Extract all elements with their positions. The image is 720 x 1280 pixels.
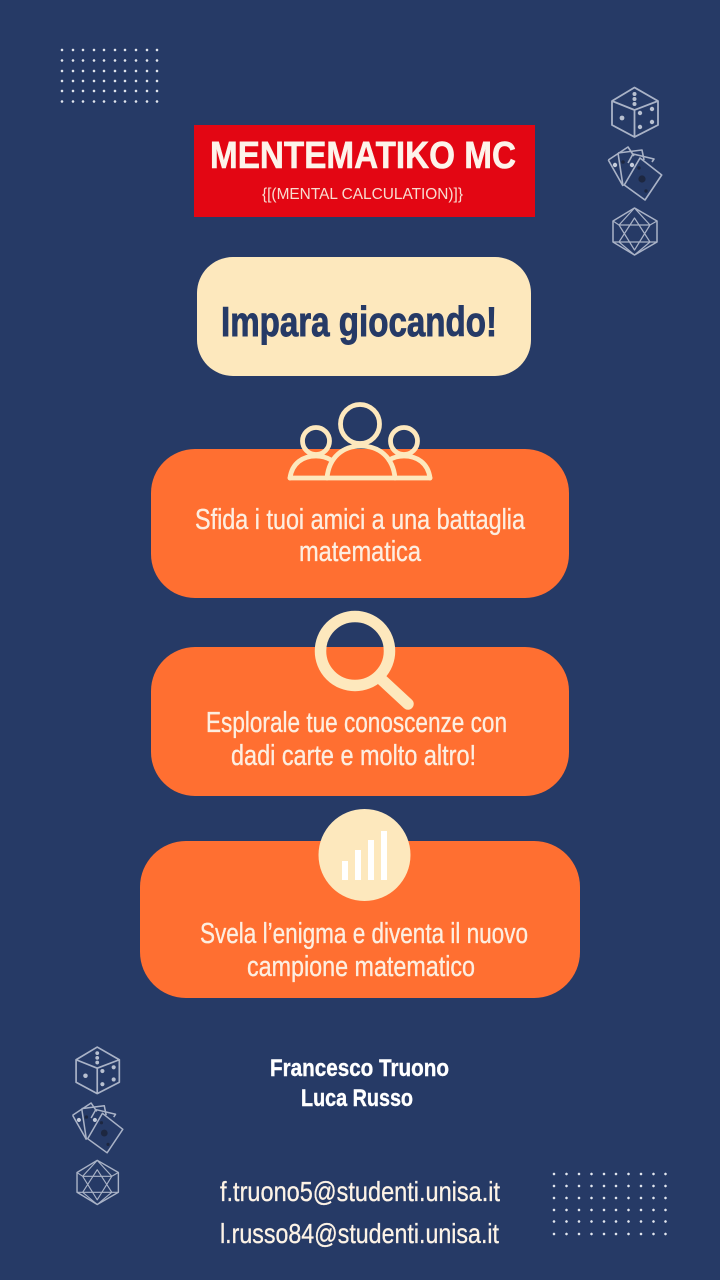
icon: bar chart circle <box>318 809 410 901</box>
icon: d20 bottom left <box>77 1160 118 1204</box>
icon: d20 top right <box>613 208 657 255</box>
icon: dice bottom left <box>76 1047 119 1094</box>
icon: dice top right <box>612 88 658 137</box>
icon: magnifier <box>320 616 408 704</box>
text: challenge: matematica <box>299 536 421 568</box>
icon: people <box>290 404 430 478</box>
dot grid: bottom right <box>553 1173 667 1235</box>
heading pill <box>197 257 531 376</box>
panel: explore <box>151 647 569 796</box>
text: explore: dadi carte e molto altro! <box>231 740 476 772</box>
dot grid: top left <box>61 49 158 103</box>
email addresses: l.russo84@studenti.unisa.it <box>220 1218 499 1249</box>
authors: Francesco Truono <box>270 1055 449 1082</box>
heading: Impara giocando! <box>221 298 497 345</box>
text: challenge: Sfida i tuoi amici a una battaglia <box>195 504 525 536</box>
text: solve: campione matematico <box>247 951 475 983</box>
logo title: MENTEMATIKO MC <box>210 135 516 177</box>
logo subtitle: {[(MENTAL CALCULATION)]} <box>262 186 463 203</box>
icon: cards bottom left <box>73 1103 123 1153</box>
text: explore: Esplorale tue conoscenze con <box>206 707 507 739</box>
panel: solve <box>140 841 580 998</box>
authors: Luca Russo <box>301 1085 413 1112</box>
logo banner <box>194 125 535 217</box>
icon: cards top right <box>608 147 662 200</box>
panel: challenge <box>151 449 569 598</box>
text: solve: Svela l’enigma e diventa il nuovo <box>200 918 528 950</box>
email addresses: f.truono5@studenti.unisa.it <box>220 1176 500 1207</box>
